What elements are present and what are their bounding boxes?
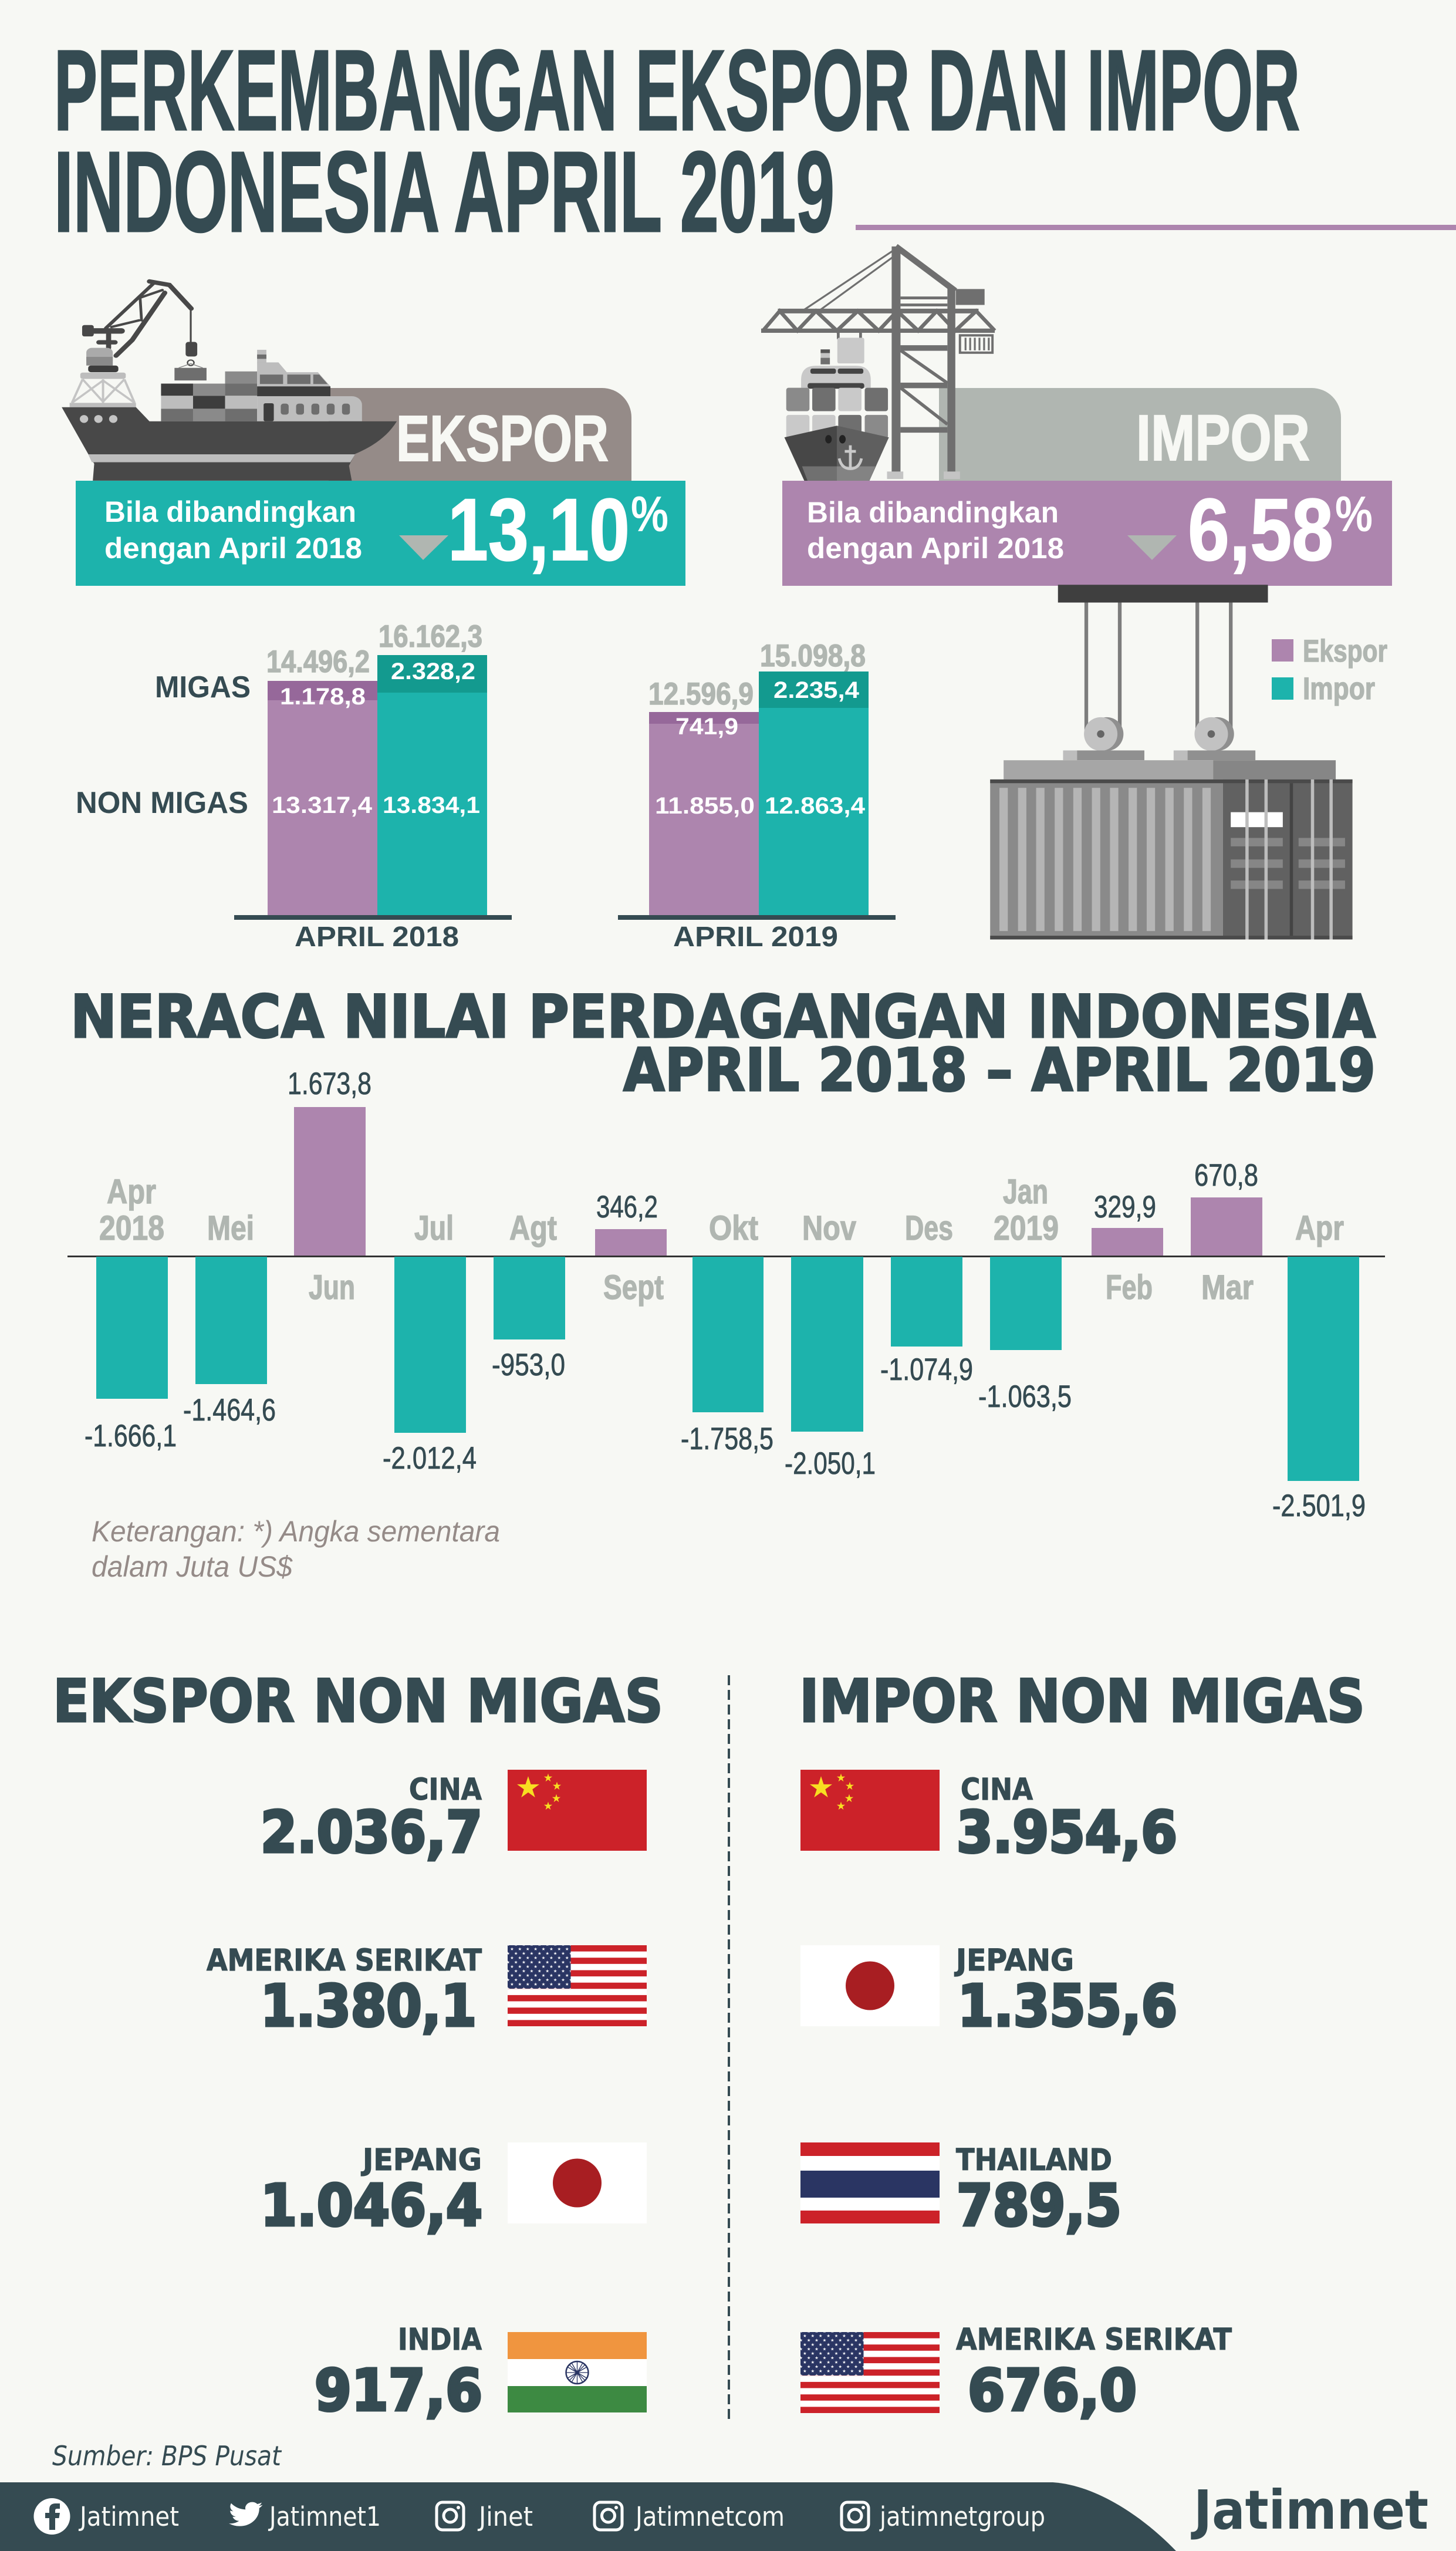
- month: agt: -953,0: [492, 1348, 565, 1382]
- title: [54, 26, 1300, 256]
- row labels: migas and non migas: NON MIGAS: [76, 786, 248, 820]
- heading: neraca nilai perdagangan: [70, 982, 1376, 1105]
- row: jepang: 1.046,4: [261, 2172, 482, 2239]
- row: cina: [800, 1770, 1177, 1865]
- ekspor callout band: Bila dibandingkan: [104, 495, 356, 528]
- month: apr 2019: [1272, 1209, 1366, 1523]
- bar chart: monthly trade balance: [67, 1067, 1385, 1523]
- row: thailand: 789,5: [957, 2172, 1121, 2239]
- instagram handle: jatimnetcom: Jatimnetcom: [634, 2501, 785, 2532]
- row: india: [315, 2323, 647, 2424]
- month: jan 2019: Jan: [1003, 1173, 1048, 1211]
- divider: [728, 1675, 730, 2422]
- heading: ekspor non migas: EKSPOR NON MIGAS: [53, 1666, 663, 1736]
- heading: neraca nilai perdagangan: NERACA NILAI PERDAGANGAN INDONESIA: [70, 982, 1376, 1051]
- icon: instagram jatimnetcom: [594, 2502, 622, 2530]
- row: amerika serikat: AMERIKA SERIKAT: [207, 1943, 482, 1978]
- impor callout band: dengan April 2018: [807, 532, 1064, 565]
- ekspor tab: [329, 388, 631, 481]
- note: keterangan: dalam Juta US$: [92, 1550, 293, 1583]
- month: feb: 329,9: [1094, 1190, 1156, 1224]
- impor label: IMPOR: [1136, 402, 1310, 474]
- legend: Ekspor: [1303, 634, 1387, 669]
- bar chart: april 2019: 12.596,9: [648, 677, 754, 711]
- month: sept: [595, 1190, 667, 1307]
- bar chart: april 2019: 11.855,0: [655, 793, 755, 819]
- icon: facebook: [34, 2498, 70, 2535]
- month: nov: -2.050,1: [785, 1446, 876, 1481]
- heading: neraca nilai perdagangan: APRIL 2018 – APRIL 2019: [623, 1035, 1376, 1105]
- month: nov: Nov: [802, 1209, 856, 1247]
- bar chart: april 2018: 2.328,2: [391, 659, 475, 684]
- instagram handle: jatimnetgroup: jatimnetgroup: [879, 2501, 1045, 2532]
- row: jepang: [261, 2142, 647, 2239]
- ekspor callout band: %: [631, 487, 668, 542]
- panel: ekspor header: [62, 281, 685, 586]
- month: jul: Jul: [414, 1209, 454, 1247]
- panel: impor non migas: [799, 1666, 1365, 2424]
- footer band: [0, 2482, 1176, 2551]
- bar chart: april 2019: 2.235,4: [773, 677, 860, 703]
- month: jul: [383, 1209, 477, 1476]
- icon: instagram jinet: [437, 2502, 464, 2530]
- row: cina: 2.036,7: [261, 1799, 482, 1865]
- facebook handle: Jatimnet: [78, 2501, 179, 2532]
- row: amerika serikat: 676,0: [968, 2357, 1137, 2424]
- note: keterangan: [92, 1515, 500, 1583]
- bar chart: april 2018: 16.162,3: [379, 619, 482, 654]
- impor callout band: [782, 480, 1392, 586]
- month: mei: Mei: [207, 1209, 254, 1247]
- bar chart: april 2018: 14.496,2: [266, 645, 370, 679]
- row: jepang: [800, 1943, 1177, 2039]
- month: jan 2019: 2019: [994, 1209, 1059, 1247]
- bar chart: april 2018: 13.834,1: [383, 792, 480, 818]
- row: cina: CINA: [961, 1773, 1033, 1807]
- panel: ekspor non migas: [53, 1666, 663, 2424]
- month: apr 2018: 2018: [99, 1209, 164, 1247]
- bar chart: april 2018: 1.178,8: [280, 684, 366, 710]
- row: india: 917,6: [315, 2357, 482, 2424]
- month: feb: Feb: [1106, 1268, 1153, 1307]
- row: jepang: JEPANG: [954, 1943, 1074, 1978]
- icon: instagram jatimnetgroup: [842, 2502, 869, 2530]
- instagram handle: jinet: Jinet: [477, 2501, 533, 2532]
- row: thailand: THAILAND: [956, 2143, 1112, 2178]
- ekspor callout band: [76, 480, 685, 586]
- heading: impor non migas: IMPOR NON MIGAS: [799, 1666, 1365, 1736]
- panel: impor header: [761, 247, 1392, 586]
- impor callout band: 6,58: [1188, 480, 1333, 579]
- row: jepang: 1.355,6: [958, 1973, 1177, 2039]
- legend: [1272, 634, 1387, 706]
- note: keterangan: Keterangan: *) Angka sementara: [92, 1515, 500, 1548]
- month: okt: -1.758,5: [681, 1422, 773, 1456]
- icon: twitter: [229, 2502, 262, 2526]
- month: okt: [681, 1209, 773, 1456]
- month: sept: 346,2: [596, 1190, 658, 1224]
- bar chart: april 2019: 12.863,4: [765, 793, 866, 819]
- row: amerika serikat: AMERIKA SERIKAT: [956, 2323, 1232, 2357]
- month: apr 2019: -2.501,9: [1272, 1489, 1366, 1523]
- month: jun: [288, 1067, 371, 1307]
- icon: port crane and container ship: [761, 247, 995, 481]
- month: mei: [183, 1209, 276, 1428]
- row: cina: CINA: [409, 1773, 482, 1807]
- bar chart: april 2018: 13.317,4: [272, 792, 373, 818]
- month: apr 2018: [85, 1173, 177, 1453]
- row: amerika serikat: 1.380,1: [261, 1973, 477, 2039]
- month: mar: 670,8: [1194, 1158, 1258, 1193]
- bar chart: april 2019: APRIL 2019: [673, 922, 838, 953]
- row labels: migas and non migas: MIGAS: [155, 670, 251, 704]
- row: cina: 3.954,6: [957, 1799, 1177, 1865]
- row: amerika serikat: [800, 2323, 1232, 2424]
- month: agt: Agt: [509, 1209, 557, 1247]
- bar chart: april 2018: [234, 619, 512, 953]
- row: jepang: JEPANG: [361, 2143, 482, 2178]
- ekspor label: EKSPOR: [396, 403, 609, 475]
- title: INDONESIA APRIL 2019: [54, 128, 835, 256]
- month: jul: -2.012,4: [383, 1441, 477, 1476]
- logo: jatimnet: Jatimnet: [1191, 2479, 1428, 2542]
- row labels: migas and non migas: [76, 670, 251, 820]
- bar chart: april 2019: 15.098,8: [760, 639, 866, 673]
- icon: cargo ship with crane: [62, 281, 397, 481]
- month: apr 2019: Apr: [1295, 1209, 1344, 1247]
- month: mei: -1.464,6: [183, 1393, 276, 1428]
- bar chart: april 2019: [618, 639, 896, 953]
- impor callout band: %: [1335, 487, 1373, 542]
- ekspor callout band: dengan April 2018: [104, 532, 362, 565]
- row: india: INDIA: [398, 2323, 482, 2357]
- month: agt: [492, 1209, 565, 1382]
- month: sept: Sept: [603, 1268, 664, 1307]
- month: feb: [1092, 1190, 1163, 1307]
- month: mar: [1191, 1158, 1262, 1307]
- twitter handle: Jatimnet1: [268, 2501, 381, 2532]
- row: thailand: [800, 2142, 1121, 2239]
- icon: hoisted container: [990, 585, 1353, 940]
- month: apr 2018: -1.666,1: [85, 1419, 177, 1453]
- legend: Impor: [1303, 672, 1375, 706]
- month: apr 2018: Apr: [107, 1173, 156, 1211]
- impor tab: [939, 388, 1341, 481]
- row: cina: [261, 1770, 647, 1865]
- source note: Sumber: BPS Pusat: [52, 2440, 282, 2472]
- month: okt: Okt: [709, 1209, 758, 1247]
- bar chart: april 2019: 741,9: [675, 714, 738, 740]
- ekspor callout band: 13,10: [448, 480, 630, 579]
- month: jan 2019: [978, 1173, 1072, 1414]
- bar chart: april 2018: APRIL 2018: [295, 922, 459, 953]
- month: des: [880, 1209, 973, 1387]
- month: jun: Jun: [309, 1268, 355, 1307]
- month: mar: Mar: [1201, 1268, 1254, 1307]
- month: jan 2019: -1.063,5: [978, 1379, 1072, 1414]
- month: des: -1.074,9: [880, 1352, 973, 1387]
- month: des: Des: [905, 1209, 953, 1247]
- impor callout band: Bila dibandingkan: [807, 496, 1059, 529]
- month: jun: 1.673,8: [288, 1067, 371, 1101]
- month: nov: [785, 1209, 876, 1481]
- row: amerika serikat: [207, 1943, 647, 2039]
